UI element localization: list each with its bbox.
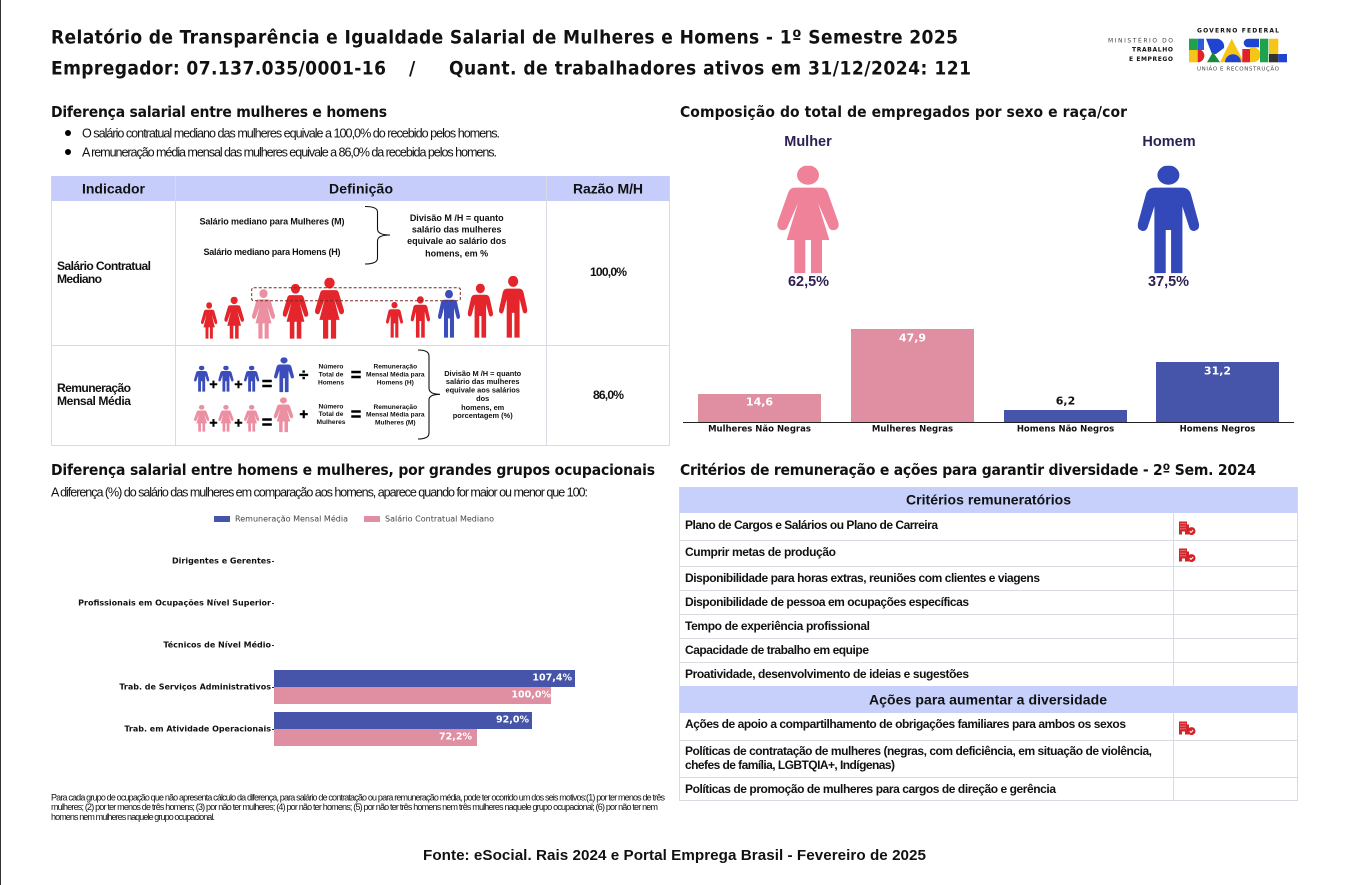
bar chart: grupos ocupacionais: Técnicos de Nível Médio (163, 640, 271, 650)
row label: salário contratual mediano: Salário Contratual (57, 259, 151, 273)
icons: mulheres ordenadas (201, 278, 344, 339)
bar chart: grupos ocupacionais: Trab. em Atividade Operacionais (124, 724, 271, 734)
bar chart: grupos ocupacionais: 100,0% (511, 690, 551, 700)
row: proatividade: Proatividade, desenvolvimento de ideias e sugestões (685, 667, 969, 681)
definition: fórmula mulheres: = (351, 404, 361, 424)
panel: homem: Homem (1142, 134, 1196, 150)
definition: fórmula homens: Homens (H) (377, 380, 414, 386)
icons: homens ordenados (386, 276, 527, 338)
title (51, 26, 971, 80)
panel: homem (1138, 134, 1199, 290)
footnote (51, 792, 666, 822)
table header (82, 180, 643, 196)
logo: ministério (1108, 36, 1173, 63)
row label: remuneração mensal média (57, 381, 131, 408)
table header: Definição (329, 180, 393, 196)
value: 100,0%: 100,0% (590, 265, 627, 279)
definition: fórmula homens: Total de (319, 372, 344, 378)
definition: fórmula homens: + (234, 376, 243, 392)
definition: fórmula mulheres: Remuneração (373, 404, 417, 411)
row: políticas de contratação: Políticas de contratação de mulheres (negras, com deficiência, em situação de violência, (685, 744, 1152, 758)
source: Fonte: eSocial. Rais 2024 e Portal Emprega Brasil - Fevereiro de 2025 (423, 847, 927, 864)
bar chart: sexo e raça/cor (683, 329, 1294, 434)
row: obrigações familiares: Ações de apoio a compartilhamento de obrigações familiares para ambos os sexos (685, 717, 1126, 731)
panel: homem: 37,5% (1148, 274, 1189, 290)
legend: Remuneração Mensal Média (235, 514, 348, 524)
definition: salário mediano: equivale ao salário dos (407, 236, 506, 246)
row: ocupações específicas: Disponibilidade de pessoa em ocupações específicas (685, 595, 969, 609)
panel: critérios e ações (679, 487, 1298, 801)
icon: obrigações familiares (1179, 722, 1196, 735)
bar chart: grupos ocupacionais: Trab. de Serviços Administrativos (119, 682, 271, 692)
bar chart: sexo e raça/cor: Mulheres Negras (872, 424, 953, 434)
bar chart: grupos ocupacionais: Dirigentes e Gerentes (172, 556, 271, 566)
row: metas de produção: Cumprir metas de produção (685, 545, 836, 559)
panel: mulher (777, 134, 839, 290)
heading: diferença salarial: Diferença salarial entre mulheres e homens (51, 103, 387, 121)
text: explicação: A diferença (%) do salário das mulheres em comparação aos homens, aparece quando for maior ou menor que 100: (51, 486, 588, 500)
definition: salário mediano: homens, em % (425, 248, 488, 258)
definition: salário mediano: salário das mulheres (412, 224, 501, 234)
bullet list: A remuneração média mensal das mulheres equivale a 86,0% da recebida pelos homens. (82, 146, 497, 160)
title: / (409, 58, 416, 80)
footnote: Para cada grupo de ocupação que não apresenta cálculo da diferença, para salário de contratação ou para remuneração média, pode ter ocorrido um dos seis motivos:(1) por ter menos de três (51, 792, 666, 802)
definition: salário mediano: Salário mediano para Homens (H) (204, 247, 340, 257)
header: ações: Ações para aumentar a diversidade (869, 692, 1107, 708)
header: critérios remuneratórios: Critérios remuneratórios (906, 492, 1071, 508)
value: 86,0%: 86,0% (593, 388, 624, 402)
logo: governo federal brasil: UNIÃO E RECONSTRUÇÃO (1197, 66, 1280, 72)
table header: Indicador (82, 180, 146, 196)
definition: fórmula homens (194, 357, 425, 394)
definition: fórmula homens: Homens (318, 380, 344, 386)
definition: fórmula mulheres: + (299, 406, 308, 423)
definition: divisão remuneração (418, 350, 522, 439)
bar chart: grupos ocupacionais (78, 556, 575, 746)
logo: governo federal brasil (1189, 28, 1287, 72)
definition: fórmula mulheres: Mensal Média para (366, 412, 425, 419)
definition: fórmula mulheres: Mulheres (317, 419, 346, 426)
definition: fórmula homens: Remuneração (373, 364, 417, 370)
definition: divisão remuneração: salário das mulheres (446, 377, 519, 386)
definition: fórmula mulheres: Número (319, 404, 343, 410)
bar chart: sexo e raça/cor: 6,2 (1056, 394, 1075, 408)
definition: fórmula homens: Número (319, 364, 343, 370)
definition: fórmula mulheres: + (209, 414, 218, 430)
icon: metas de produção (1179, 548, 1196, 562)
table header: Razão M/H (573, 180, 643, 196)
definition: fórmula homens: = (351, 365, 361, 385)
row: políticas de contratação (685, 744, 1152, 772)
definition: fórmula homens: ÷ (299, 366, 308, 384)
row: horas extras: Disponibilidade para horas extras, reuniões com clientes e viagens (685, 571, 1040, 585)
title: Empregador: 07.137.035/0001-16 (51, 58, 386, 80)
bar chart: grupos ocupacionais: 92,0% (496, 714, 529, 726)
footnote: homens nem mulheres naquele grupo ocupacional. (51, 812, 215, 822)
bar chart: sexo e raça/cor: Mulheres Não Negras (708, 424, 811, 434)
panel: mulher: Mulher (784, 134, 832, 150)
definition: divisão remuneração: porcentagem (%) (453, 411, 513, 420)
title: Quant. de trabalhadores ativos em 31/12/2024: 121 (449, 58, 971, 80)
icon: homem (1138, 165, 1199, 273)
definition: fórmula mulheres: + (234, 414, 243, 430)
row label: remuneração mensal média: Mensal Média (57, 394, 131, 408)
row label: salário contratual mediano (57, 259, 151, 286)
logo: ministério: E EMPREGO (1129, 56, 1173, 63)
definition: salário mediano: Salário mediano para Mulheres (M) (200, 216, 344, 226)
heading: critérios: Critérios de remuneração e ações para garantir diversidade - 2º Sem. 2024 (680, 461, 1256, 479)
legend: Salário Contratual Mediano (385, 514, 494, 524)
definition: fórmula mulheres: Mulheres (M) (375, 419, 416, 426)
mediana: retângulo tracejado (252, 288, 460, 301)
definition: divisão remuneração: equivale aos salários (446, 386, 520, 394)
definition: salário mediano: Divisão M /H = quanto (410, 213, 504, 223)
title: Relatório de Transparência e Igualdade Salarial de Mulheres e Homens - 1º Semestre 2025 (51, 26, 958, 48)
bullet list (65, 126, 500, 160)
legend (214, 514, 494, 524)
bar chart: sexo e raça/cor: Homens Negros (1180, 424, 1255, 434)
heading: composição: Composição do total de empregados por sexo e raça/cor (680, 103, 1127, 121)
bar chart: grupos ocupacionais: 107,4% (532, 672, 572, 684)
definition: salário mediano (200, 206, 506, 264)
definition: divisão remuneração: dos (476, 394, 489, 403)
footnote: mulheres; (2) por ter menos de três homens; (3) por não ter mulheres; (4) por não ter homens; (5) por não ter três homens nem três mulheres naquele grupo ocupacional; (6) por não ter nem (51, 802, 658, 812)
logo: ministério: TRABALHO (1132, 46, 1173, 54)
row label: remuneração mensal média: Remuneração (57, 381, 131, 395)
panel: mulher: 62,5% (788, 274, 829, 290)
heading: grupos ocupacionais: Diferença salarial entre homens e mulheres, por grandes grupos ocupacionais (51, 461, 655, 479)
row: capacidade de trabalho: Capacidade de trabalho em equipe (685, 643, 869, 657)
definition: divisão remuneração: homens, em (461, 403, 505, 412)
definition: fórmula mulheres: = (262, 412, 272, 432)
bar chart: grupos ocupacionais: Profissionais em Ocupações Nível Superior (78, 598, 271, 608)
row: tempo de experiência: Tempo de experiência profissional (685, 619, 870, 633)
row: políticas de promoção: Políticas de promoção de mulheres para cargos de direção e gerência (685, 782, 1056, 796)
bar chart: sexo e raça/cor: Homens Não Negros (1017, 424, 1114, 434)
row: plano de cargos: Plano de Cargos e Salários ou Plano de Carreira (685, 518, 938, 532)
definition: fórmula homens: Mensal Média para (366, 372, 425, 378)
row label: salário contratual mediano: Mediano (57, 272, 102, 286)
bar chart: sexo e raça/cor: 47,9 (899, 332, 926, 344)
bar chart: sexo e raça/cor: 14,6 (746, 396, 773, 408)
definition: fórmula mulheres (194, 397, 425, 432)
logo: governo federal brasil: GOVERNO FEDERAL (1197, 28, 1279, 34)
definition: fórmula mulheres: Total de (319, 411, 344, 418)
icon: plano de cargos (1179, 522, 1196, 535)
icon: mulher (777, 165, 839, 273)
bar chart: grupos ocupacionais: 72,2% (439, 732, 472, 742)
bullet list: O salário contratual mediano das mulheres equivale a 100,0% do recebido pelos homens. (82, 126, 500, 140)
bar chart: sexo e raça/cor: 31,2 (1204, 364, 1231, 378)
panel: tabela de indicadores (51, 176, 670, 446)
definition: fórmula homens: = (262, 374, 272, 394)
definition: fórmula homens: + (209, 376, 218, 392)
row: políticas de contratação: chefes de família, LGBTQIA+, Indígenas) (685, 758, 895, 772)
logo: ministério: MINISTÉRIO DO (1108, 36, 1173, 44)
definition: divisão remuneração: Divisão M /H = quanto (444, 369, 522, 378)
